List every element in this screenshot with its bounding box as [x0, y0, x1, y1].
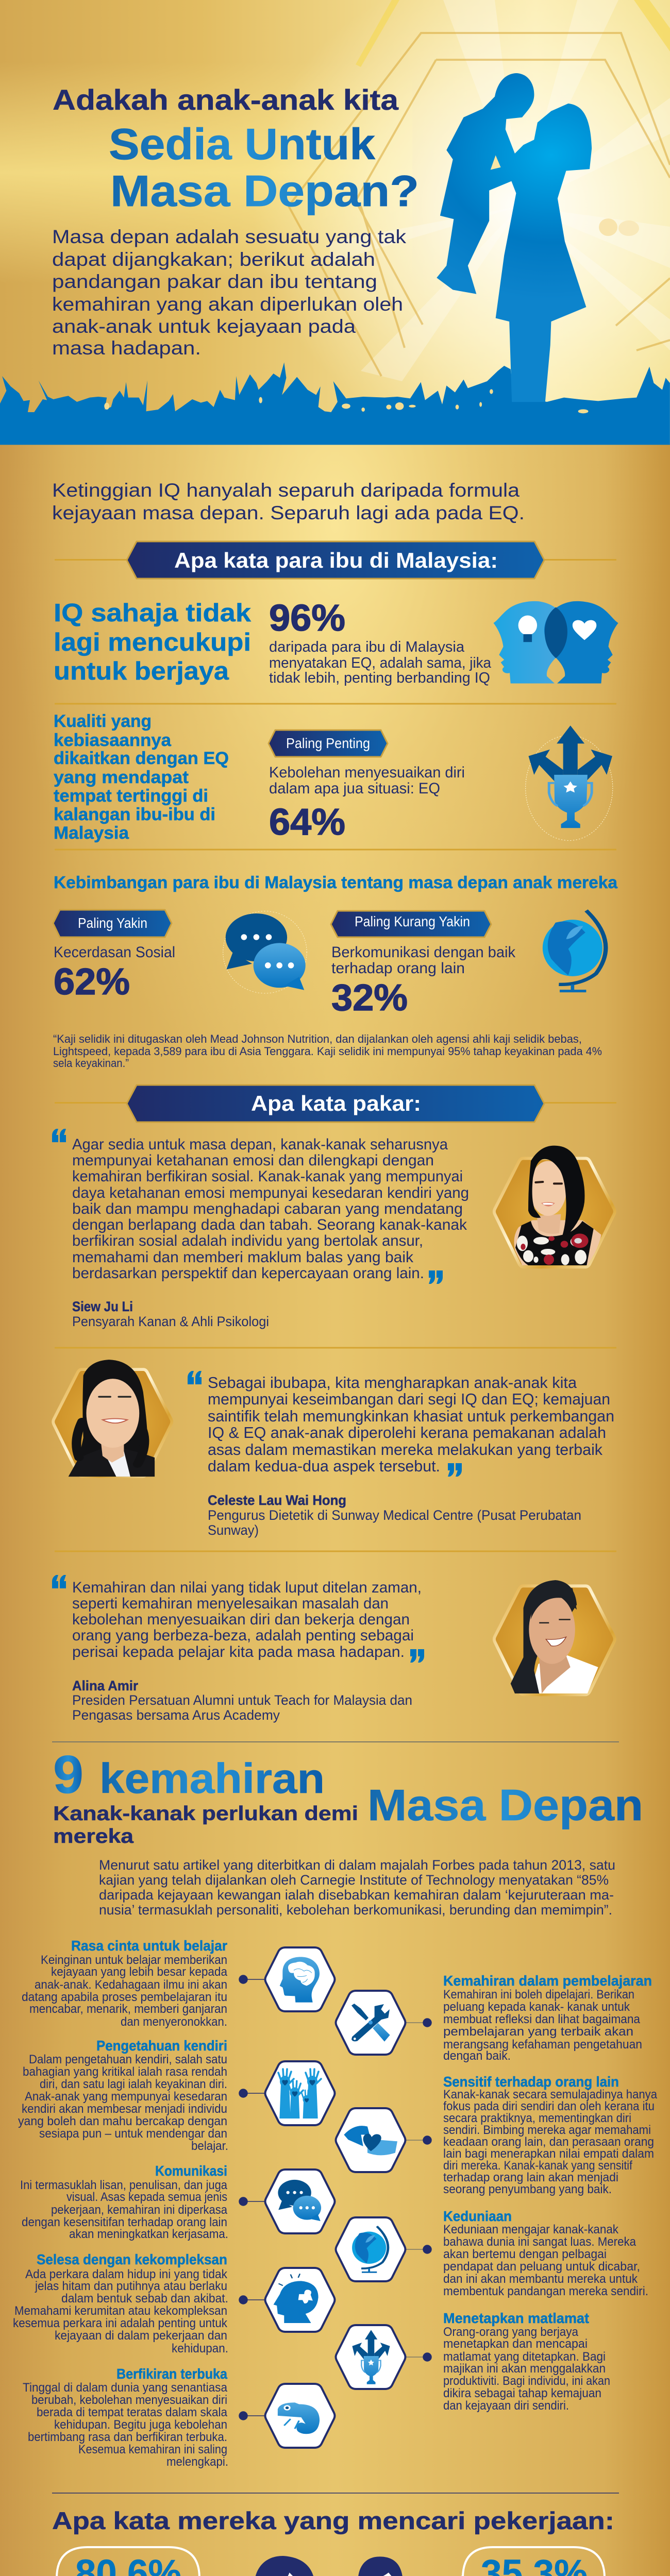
skill: Berfikiran terbuka: berubah, kebolehan menyesuaikan diri — [31, 2393, 227, 2407]
skill: Pengetahuan kendiri: bahagian yang kritikal ialah rasa rendah — [23, 2065, 227, 2079]
skill: Pengetahuan kendiri: Pengetahuan kendiri — [96, 2038, 227, 2054]
skill: Menetapkan matlamat — [443, 2310, 610, 2413]
callout: 80.6 percent — [57, 2547, 239, 2576]
skill: Selesa dengan kekompleksan: dalam bentuk sebab dan akibat. — [61, 2292, 228, 2306]
panel: least confident — [331, 910, 606, 1019]
skill: Menetapkan matlamat: dikira sebagai tahap kemajuan — [443, 2386, 601, 2400]
icon: globe — [543, 910, 606, 991]
skill: Rasa cinta untuk belajar: Rasa cinta untuk belajar — [71, 1938, 227, 1954]
intro text: Masa depan adalah sesuatu yang tak — [52, 226, 407, 247]
quote text: Kemahiran dan nilai yang tidak luput ditelan zaman, — [72, 1579, 422, 1596]
heading: Kualiti: kalangan ibu-ibu di — [54, 805, 215, 824]
panel: IQ alone — [54, 598, 618, 686]
intro paragraph: Forbes article: nusia’ termasuklah personaliti, kebolehan berkomunikasi, berunding dan memimpin”. — [99, 1902, 612, 1918]
skill: Rasa cinta untuk belajar: kejayaan yang lebih besar kepada — [51, 1965, 227, 1979]
photo: Siew Ju Li — [494, 1146, 615, 1267]
quote text — [72, 1136, 469, 1282]
expert name: Celeste Lau Wai Hong — [208, 1493, 346, 1508]
stat description: tidak lebih, penting berbanding IQ — [269, 670, 490, 686]
skill: Komunikasi: pekerjaan, kemahiran ini diperkasa — [51, 2203, 227, 2217]
skill: Sensitif terhadap orang lain — [443, 2074, 657, 2196]
expert role — [72, 1692, 412, 1723]
quote text: mempunyai ketahanan emosi dan dilengkapi dengan — [72, 1152, 434, 1169]
skill: Rasa cinta untuk belajar: dan menyeronokkan. — [121, 2015, 227, 2029]
intro text: masa hadapan. — [52, 337, 201, 359]
stat description — [269, 639, 492, 686]
heading ribbon: experts: Apa kata pakar: — [251, 1091, 421, 1115]
intro paragraph: Forbes article: Menurut satu artikel yang diterbitkan di dalam majalah Forbes pada tahun 2013, satu — [99, 1857, 615, 1873]
quote text: seperti kemahiran menyelesaikan masalah dan — [72, 1595, 389, 1612]
icon: trophy with arrows — [526, 725, 613, 840]
expert role: Pengasas bersama Arus Academy — [72, 1707, 280, 1723]
icon: opening quote — [188, 1371, 202, 1384]
quote text: berdasarkan perspektif dan kepercayaan orang lain. — [72, 1265, 424, 1282]
skill: Sensitif terhadap orang lain: seorang penyumbang yang baik. — [443, 2182, 612, 2196]
quote text: perisai kepada pelajar kita pada masa hadapan. — [72, 1643, 405, 1660]
tag: Paling Yakin: Paling Yakin — [78, 915, 147, 931]
intro text: anak-anak untuk kejayaan pada — [52, 316, 356, 337]
intro text: pandangan pakar dan ibu tentang — [52, 271, 377, 292]
divider — [52, 2493, 619, 2494]
quote text: orang yang berbeza-beza, adalah penting sebagai — [72, 1627, 414, 1644]
stat: 96 percent: 96% — [269, 598, 345, 639]
panel: expert quote Celeste Lau — [53, 1360, 614, 1538]
intro paragraph: Forbes article: daripada kejayaan kewangan ialah disebabkan kemahiran dalam ‘kejuruteraan ma- — [99, 1887, 614, 1903]
quality description — [269, 764, 465, 797]
panel: most confident — [53, 910, 307, 1003]
intro text — [52, 226, 407, 359]
skill: Kemahiran dalam pembelajaran: merangsang kefahaman pengetahuan — [443, 2038, 642, 2052]
icon: tools — [336, 1991, 405, 2055]
quote text: memahami dan memberi maklum balas yang baik — [72, 1249, 414, 1266]
intro statement IQ and EQ: Ketinggian IQ hanyalah separuh daripada formula — [52, 480, 520, 501]
skill: Pengetahuan kendiri: Anak-anak yang mempunyai kesedaran — [25, 2090, 227, 2104]
skill: Menetapkan matlamat: Menetapkan matlamat — [443, 2310, 589, 2326]
skill: Pengetahuan kendiri: Dalam pengetahuan kendiri, salah satu — [29, 2053, 227, 2066]
panel: job seekers stats — [57, 2547, 605, 2576]
icon: two job seekers at laptop — [241, 2556, 429, 2576]
photo: Celeste Lau Wai Hong — [53, 1360, 172, 1477]
skill: Selesa dengan kekompleksan: jelas hitam dan putihnya atau berlaku — [35, 2279, 227, 2293]
heading: Kualiti — [54, 711, 229, 843]
skill: Keduniaan: membentuk pandangan mereka sendiri. — [443, 2284, 648, 2298]
skill: Rasa cinta untuk belajar: mencabar, menarik, memberi ganjaran — [29, 2002, 227, 2016]
skill: Sensitif terhadap orang lain: keadaan orang lain, dan perasaan orang — [443, 2135, 654, 2149]
tag: Paling Penting — [269, 730, 388, 757]
stat: 64 percent: 64% — [269, 802, 345, 843]
quality description: dalam apa jua situasi: EQ — [269, 780, 440, 797]
icon: head with puzzle piece — [265, 2268, 335, 2332]
heading ribbon: mothers: Apa kata para ibu di Malaysia: — [174, 548, 498, 572]
expert role — [208, 1507, 581, 1538]
panel: expert quote Siew Ju Li — [52, 1129, 615, 1329]
title: Sedia Untuk — [109, 120, 376, 169]
skill: Keduniaan: pendapat dan peluang untuk dicabar, — [443, 2260, 640, 2274]
heading: mothers worries: Kebimbangan para ibu di Malaysia tentang masa depan anak mereka — [54, 873, 618, 892]
footnote: survey: sela keyakinan.” — [53, 1057, 129, 1070]
heading: IQ sahaja: lagi mencukupi — [54, 629, 251, 656]
skill: Rasa cinta untuk belajar — [22, 1938, 227, 2029]
stat: 62 percent: 62% — [54, 961, 130, 1003]
tag: Paling Kurang Yakin — [331, 911, 491, 937]
skill: Menetapkan matlamat: majikan ini akan menggalakkan — [443, 2362, 606, 2376]
skill: Rasa cinta untuk belajar: Keinginan untuk belajar memberikan — [41, 1953, 227, 1967]
skill: Komunikasi: Ini termasuklah lisan, penulisan, dan juga — [20, 2178, 227, 2192]
panel: hero — [0, 0, 670, 448]
icon: closing quote — [429, 1270, 443, 1284]
icon: opening quote — [52, 1575, 66, 1588]
skill: Selesa dengan kekompleksan — [13, 2251, 228, 2355]
icon: chameleon — [265, 2384, 335, 2448]
footnote: survey — [53, 1032, 602, 1070]
heading: 9 kemahiran: 9 — [53, 1745, 83, 1805]
tag: Paling Kurang Yakin: Paling Kurang Yakin — [355, 913, 470, 929]
quote text: Sebagai ibubapa, kita mengharapkan anak-anak kita — [208, 1374, 577, 1392]
stat: 32 percent: 32% — [331, 977, 408, 1019]
intro text: dapat dijangkakan; berikut adalah — [52, 249, 375, 270]
heading: Kualiti: dikaitkan dengan EQ — [54, 749, 229, 768]
skill: Pengetahuan kendiri — [18, 2038, 228, 2153]
icon: mother lifting child silhouette — [437, 73, 592, 402]
divider — [52, 1741, 619, 1742]
heading: Kualiti: tempat tertinggi di — [54, 786, 208, 806]
skill: Kemahiran dalam pembelajaran: membuat refleksi dan lihat bagaimana — [443, 2012, 640, 2026]
skill: Komunikasi: dengan kesensitifan terhadap orang lain — [22, 2215, 227, 2229]
heading: IQ sahaja — [54, 599, 252, 685]
title — [53, 83, 419, 216]
skill: Berfikiran terbuka: bertimbang rasa dan berfikiran terbuka. — [28, 2430, 227, 2444]
skill: Berfikiran terbuka: kehidupan. Begitu juga kebolehan — [54, 2418, 227, 2432]
skill: Kemahiran dalam pembelajaran — [443, 1973, 652, 2063]
heading ribbon: experts — [55, 1085, 616, 1122]
skill: Rasa cinta untuk belajar: datang apabila proses pembelajaran itu — [22, 1990, 227, 2004]
skill: Pengetahuan kendiri: yang boleh dan mahu bercakap dengan — [18, 2114, 227, 2128]
heading: 9 kemahiran — [53, 1745, 643, 1848]
skill: Kemahiran dalam pembelajaran: Kemahiran dalam pembelajaran — [443, 1973, 652, 1989]
quote text: baik dan mampu menghadapi cabaran yang mendatang — [72, 1200, 463, 1217]
label: Berkomunikasi: terhadap orang lain — [331, 960, 465, 977]
quote text: kebolehan menyesuaikan diri dan bekerja dengan — [72, 1611, 410, 1628]
skill: Berfikiran terbuka: Tinggal di dalam dunia yang senantiasa — [23, 2381, 227, 2395]
icon: goal trophy — [336, 2325, 405, 2389]
heading: Kualiti: Kualiti yang — [54, 711, 152, 731]
heading: 9 kemahiran: kemahiran — [99, 1755, 325, 1802]
skill: Sensitif terhadap orang lain: sendiri. Bimbing mereka agar memahami — [443, 2123, 651, 2137]
skill: Keduniaan — [443, 2208, 648, 2298]
intro text: kemahiran yang akan diperlukan oleh — [52, 294, 403, 315]
skill: Rasa cinta untuk belajar: anak-anak. Kedahagaan ilmu ini akan — [35, 1978, 227, 1992]
expert role: Pensyarah Kanan & Ahli Psikologi — [72, 1314, 269, 1329]
heading: job seekers: Apa kata mereka yang mencari pekerjaan: — [52, 2507, 614, 2534]
skill: Selesa dengan kekompleksan: Selesa dengan kekompleksan — [37, 2251, 227, 2267]
photo: Alina Amir — [494, 1580, 615, 1694]
skill: Menetapkan matlamat: matlamat yang ditetapkan. Bagi — [443, 2350, 606, 2364]
skill: Keduniaan: Keduniaan mengajar kanak-kanak — [443, 2223, 619, 2236]
skill: Sensitif terhadap orang lain: terhadap orang lain akan menjadi — [443, 2171, 618, 2184]
skill: Selesa dengan kekompleksan: Ada perkara dalam hidup ini yang tidak — [25, 2267, 228, 2281]
skill: Menetapkan matlamat: dan kejayaan diri sendiri. — [443, 2399, 569, 2413]
skill: Pengetahuan kendiri: kendiri akan membesar menjadi individu — [22, 2102, 227, 2116]
quote text: saintifik telah memungkinkan khasiat untuk perkembangan — [208, 1407, 614, 1425]
stat description: daripada para ibu di Malaysia — [269, 639, 465, 655]
skill: Sensitif terhadap orang lain: Sensitif terhadap orang lain — [443, 2074, 619, 2090]
skill: Berfikiran terbuka: Kesemua kemahiran ini saling — [78, 2443, 227, 2456]
skill: Selesa dengan kekompleksan: kesemua perkara ini adalah penting untuk — [13, 2316, 228, 2330]
quote text: mempunyai keseimbangan dari segi IQ dan EQ; kemajuan — [208, 1390, 610, 1408]
expert name: Siew Ju Li — [72, 1299, 133, 1314]
heading: 9 kemahiran: Kanak-kanak perlukan demi — [53, 1803, 358, 1825]
expert name: Alina Amir — [72, 1678, 138, 1693]
intro statement IQ and EQ: kejayaan masa depan. Separuh lagi ada pada EQ. — [52, 502, 525, 523]
skill: Keduniaan: Keduniaan — [443, 2208, 512, 2224]
icon: opening quote — [52, 1129, 66, 1142]
footnote: survey: Lightspeed, kepada 3,589 para ibu di Asia Tenggara. Kaji selidik ini mempunyai 95% tahap keyakinan pada 4% — [53, 1045, 602, 1058]
stat description: menyatakan EQ, adalah sama, jika — [269, 655, 492, 671]
quality description: Kebolehan menyesuaikan diri — [269, 764, 465, 781]
skill: Menetapkan matlamat: menetapkan dan mencapai — [443, 2337, 588, 2351]
icon: chat bubbles small — [265, 2170, 335, 2233]
skill: Kemahiran dalam pembelajaran: dengan baik. — [443, 2049, 511, 2063]
skill: Keduniaan: bahawa dunia ini sangat luas. Mereka — [443, 2235, 636, 2249]
skill: Kemahiran dalam pembelajaran: peluang kepada kanak- kanak untuk — [443, 2000, 630, 2014]
expert role: Presiden Persatuan Alumni untuk Teach for Malaysia dan — [72, 1692, 412, 1708]
label: Kecerdasan Sosial: Kecerdasan Sosial — [54, 944, 175, 961]
skill: Kemahiran dalam pembelajaran: pembelajaran yang terbaik akan — [443, 2025, 633, 2039]
quote text: dalam kedua-dua aspek tersebut. — [208, 1457, 440, 1475]
heading: IQ sahaja: IQ sahaja tidak — [54, 599, 252, 627]
heading: IQ sahaja: untuk berjaya — [54, 657, 229, 685]
skill: Pengetahuan kendiri: diri, dan satu lagi ialah keyakinan diri. — [40, 2077, 227, 2091]
icon: closing quote — [410, 1649, 424, 1663]
skill: Komunikasi: visual. Asas kepada semua jenis — [66, 2190, 227, 2204]
quote text: berfikiran sosial adalah individu yang bertolak ansur, — [72, 1232, 423, 1249]
skill: Menetapkan matlamat: Orang-orang yang berjaya — [443, 2325, 578, 2339]
skill: Berfikiran terbuka: Berfikiran terbuka — [116, 2366, 227, 2382]
panel: expert quote Alina Amir — [52, 1575, 615, 1723]
quote text: asas dalam memastikan mereka melakukan yang terbaik — [208, 1440, 602, 1459]
footnote: survey: “Kaji selidik ini ditugaskan oleh Mead Johnson Nutrition, dan dijalankan oleh agensi ahli kaji selidik bebas, — [53, 1032, 582, 1045]
heading: 9 kemahiran: mereka — [53, 1825, 133, 1848]
label: Berkomunikasi: Berkomunikasi dengan baik — [331, 944, 516, 961]
skill: Sensitif terhadap orang lain: diri mereka. Kanak-kanak yang sensitif — [443, 2159, 632, 2173]
skill: Sensitif terhadap orang lain: fokus pada diri sendiri dan oleh kerana itu — [443, 2099, 655, 2113]
skill: Sensitif terhadap orang lain: secara praktiknya, mementingkan diri — [443, 2111, 631, 2125]
quote text — [208, 1374, 614, 1475]
quote text: IQ & EQ anak-anak diperolehi kerana pemakanan adalah — [208, 1423, 606, 1442]
heading: Kualiti: kebiasaannya — [54, 731, 172, 750]
heading ribbon: mothers — [55, 541, 616, 579]
tag: Paling Penting: Paling Penting — [286, 735, 370, 751]
panel: most important quality — [54, 711, 613, 843]
skill: Menetapkan matlamat: produktiviti. Bagi individu, ini akan — [443, 2374, 610, 2388]
quote text — [72, 1579, 422, 1660]
skill: Selesa dengan kekompleksan: kehidupan. — [172, 2342, 228, 2355]
skill: Komunikasi: akan meningkatkan kerjasama. — [69, 2227, 228, 2241]
connector dots and lines — [239, 1975, 431, 2420]
icon: brain head — [265, 1947, 335, 2011]
hero golden backdrop — [0, 0, 670, 448]
expert role: Sunway) — [208, 1522, 259, 1538]
icon: chat bubbles — [223, 911, 307, 993]
label: Berkomunikasi — [331, 944, 516, 977]
heading: Kualiti: yang mendapat — [54, 768, 189, 787]
intro statement IQ and EQ — [52, 480, 525, 523]
skill: Komunikasi: Komunikasi — [155, 2163, 227, 2179]
icon: helping hands and heart — [336, 2108, 405, 2172]
intro paragraph: Forbes article — [99, 1857, 615, 1918]
skill: Keduniaan: akan bertemu dengan pelbagai — [443, 2247, 607, 2261]
callout: 35.3 percent — [423, 2547, 605, 2576]
skill: Sensitif terhadap orang lain: lain bagi menerapkan nilai empati dalam — [443, 2147, 654, 2161]
skill: Selesa dengan kekompleksan: kejayaan di dalam pekerjaan dan — [55, 2329, 227, 2343]
skill: Keduniaan: dan ini akan membantu mereka untuk — [443, 2272, 638, 2286]
heading: 9 kemahiran: Masa Depan — [367, 1781, 643, 1830]
quote text: daya ketahanan emosi mempunyai kesedaran kendiri yang — [72, 1184, 469, 1201]
quote text: kemahiran berfikiran sosial. Kanak-kanak yang mempunyai — [72, 1168, 463, 1185]
quote text: dengan berlapang dada dan tabah. Seorang kanak-kanak — [72, 1216, 467, 1233]
skill: Berfikiran terbuka: melengkapi. — [166, 2455, 228, 2469]
skill: Pengetahuan kendiri: sesiapa pun – untuk mendengar dan — [39, 2127, 227, 2141]
skill: Berfikiran terbuka: berada di tempat teratas dalam skala — [37, 2405, 227, 2419]
icon: globe small — [336, 2217, 405, 2281]
blue grass band — [0, 362, 670, 445]
skill: Pengetahuan kendiri: belajar. — [191, 2139, 228, 2153]
skill: Kemahiran dalam pembelajaran: Kemahiran ini boleh dipelajari. Berikan — [443, 1988, 634, 2002]
title: Masa Depan? — [110, 167, 419, 216]
panel: nine skills diagram — [13, 1938, 657, 2469]
skill: Komunikasi — [20, 2163, 228, 2241]
icon: raised hands — [265, 2061, 335, 2132]
title: Adakah anak-anak kita — [53, 83, 399, 116]
expert role: Pengurus Dietetik di Sunway Medical Centre (Pusat Perubatan — [208, 1507, 581, 1523]
heading: Kualiti: Malaysia — [54, 823, 129, 843]
intro paragraph: Forbes article: kajian yang telah dijalankan oleh Carnegie Institute of Technology menyatakan “85% — [99, 1872, 609, 1888]
icon: two heads brain and heart — [493, 601, 618, 684]
icon: closing quote — [448, 1463, 462, 1477]
skill: Selesa dengan kekompleksan: Memahami kerumitan atau kekompleksan — [14, 2304, 227, 2318]
tag: Paling Yakin — [53, 910, 172, 937]
quote text: Agar sedia untuk masa depan, kanak-kanak seharusnya — [72, 1136, 448, 1153]
skill: Berfikiran terbuka — [23, 2366, 228, 2469]
